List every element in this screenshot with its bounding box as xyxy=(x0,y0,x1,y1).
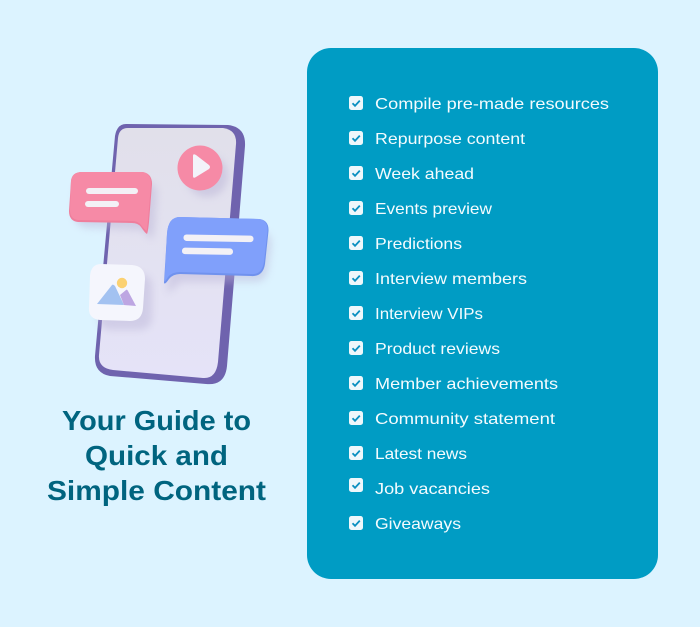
title: Simple Content xyxy=(47,475,266,506)
item: Week ahead: Week ahead xyxy=(375,166,474,183)
title: Quick and xyxy=(85,440,228,471)
title: Your Guide to xyxy=(62,405,251,436)
phone body xyxy=(95,124,245,384)
item: Community statement: Community statement xyxy=(375,411,556,428)
item: Interview members: Interview members xyxy=(375,271,527,288)
blue chat bubble xyxy=(164,217,271,294)
item: Product reviews: Product reviews xyxy=(375,341,500,358)
pink chat bubble xyxy=(69,172,157,240)
item: Predictions: Predictions xyxy=(375,236,462,253)
item: Interview VIPs: Interview VIPs xyxy=(375,306,483,323)
item: Job vacancies xyxy=(349,478,490,498)
play button xyxy=(178,146,228,197)
illustration: phone with chat bubbles xyxy=(69,124,271,384)
image app icon xyxy=(89,264,152,330)
item: Member achievements: Member achievements xyxy=(375,376,558,393)
title xyxy=(47,405,266,506)
item: Latest news: Latest news xyxy=(375,446,467,463)
panel: checklist xyxy=(307,48,658,579)
item: Compile pre-made resources: Compile pre-made resources xyxy=(375,96,609,113)
phone screen xyxy=(99,128,236,378)
item: Repurpose content: Repurpose content xyxy=(375,131,526,148)
item: Giveaways xyxy=(349,516,461,533)
item: Giveaways: Giveaways xyxy=(375,516,461,533)
item: Events preview: Events preview xyxy=(375,201,492,218)
item: Job vacancies: Job vacancies xyxy=(375,481,490,498)
